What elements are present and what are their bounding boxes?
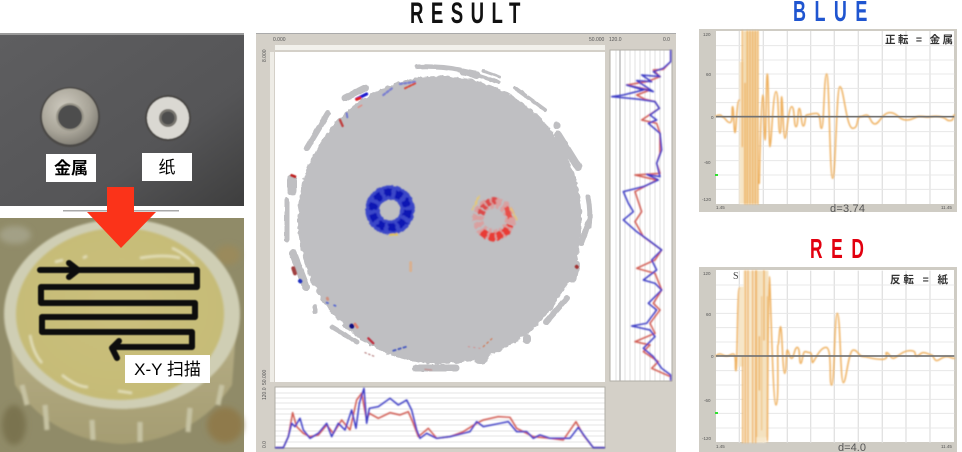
y axis labels: 60 — [706, 312, 712, 317]
axis labels: 0.0 — [262, 441, 268, 448]
y axis labels — [702, 32, 952, 210]
paste surface — [16, 228, 224, 400]
circular scan area — [298, 76, 582, 364]
green gate marker — [715, 412, 718, 414]
y axis labels: 60 — [706, 72, 712, 77]
y axis labels: 11.45 — [941, 205, 952, 210]
photo: metal and paper washers — [0, 33, 244, 206]
label: S: S — [733, 271, 739, 282]
blue ring — [372, 192, 408, 235]
chart: red waveform paper — [699, 267, 957, 452]
y axis labels: -60 — [704, 398, 711, 403]
y axis labels: -120 — [702, 436, 712, 441]
panel: C-scan image — [275, 52, 605, 382]
arrow: serpentine scan path — [40, 263, 197, 358]
lid rim — [4, 219, 240, 409]
y axis labels: 120 — [703, 271, 711, 276]
y axis labels: 11.45 — [941, 444, 952, 449]
heading: RED: RED — [810, 233, 864, 264]
axis labels: 50.000 — [262, 369, 268, 385]
chart: blue waveform metal — [699, 29, 957, 215]
label: d value: d=3.74 — [830, 203, 865, 215]
photo: lid with paste and scan path — [0, 210, 244, 452]
axis labels: 0.0 — [663, 37, 670, 43]
y axis labels: 120 — [703, 32, 711, 37]
red ring — [472, 195, 517, 237]
outer fragments — [287, 67, 590, 368]
y axis labels: 1.45 — [716, 205, 725, 210]
icon: metal washer — [40, 87, 100, 147]
panel: X profile chart — [275, 387, 605, 448]
label: reverse = paper: 反転 = 紙 — [890, 273, 948, 286]
panel: scan result software window — [256, 33, 676, 452]
axis labels: 0.000 — [273, 37, 286, 43]
green gate marker — [715, 174, 718, 176]
axis labels: 120.0 — [262, 387, 268, 400]
label: paper: 纸 — [158, 158, 176, 177]
axis labels: 8.000 — [262, 49, 268, 62]
label: X-Y scan: X-Y 扫描 — [134, 360, 201, 379]
icon: paper washer — [145, 95, 191, 141]
label: paper — [142, 153, 192, 181]
panel: Y profile chart — [610, 50, 672, 381]
label: metal: 金属 — [54, 158, 88, 178]
defect specks — [292, 82, 577, 370]
axis labels: 50.000 — [589, 37, 605, 43]
y axis labels: 1.45 — [716, 444, 725, 449]
axis labels: 120.0 — [609, 37, 622, 43]
arrow: red down arrow — [87, 187, 156, 248]
y axis labels: 0 — [711, 354, 714, 359]
axis labels — [262, 37, 670, 448]
y axis labels: -120 — [702, 197, 712, 202]
y axis labels: -60 — [704, 160, 711, 165]
y axis labels: 0 — [711, 115, 714, 120]
label: X-Y scan — [125, 355, 210, 383]
lid side wall — [9, 330, 236, 444]
label: forward = metal: 正転 = 金属 — [885, 33, 953, 46]
y axis labels — [702, 271, 952, 449]
label: metal — [46, 154, 96, 182]
